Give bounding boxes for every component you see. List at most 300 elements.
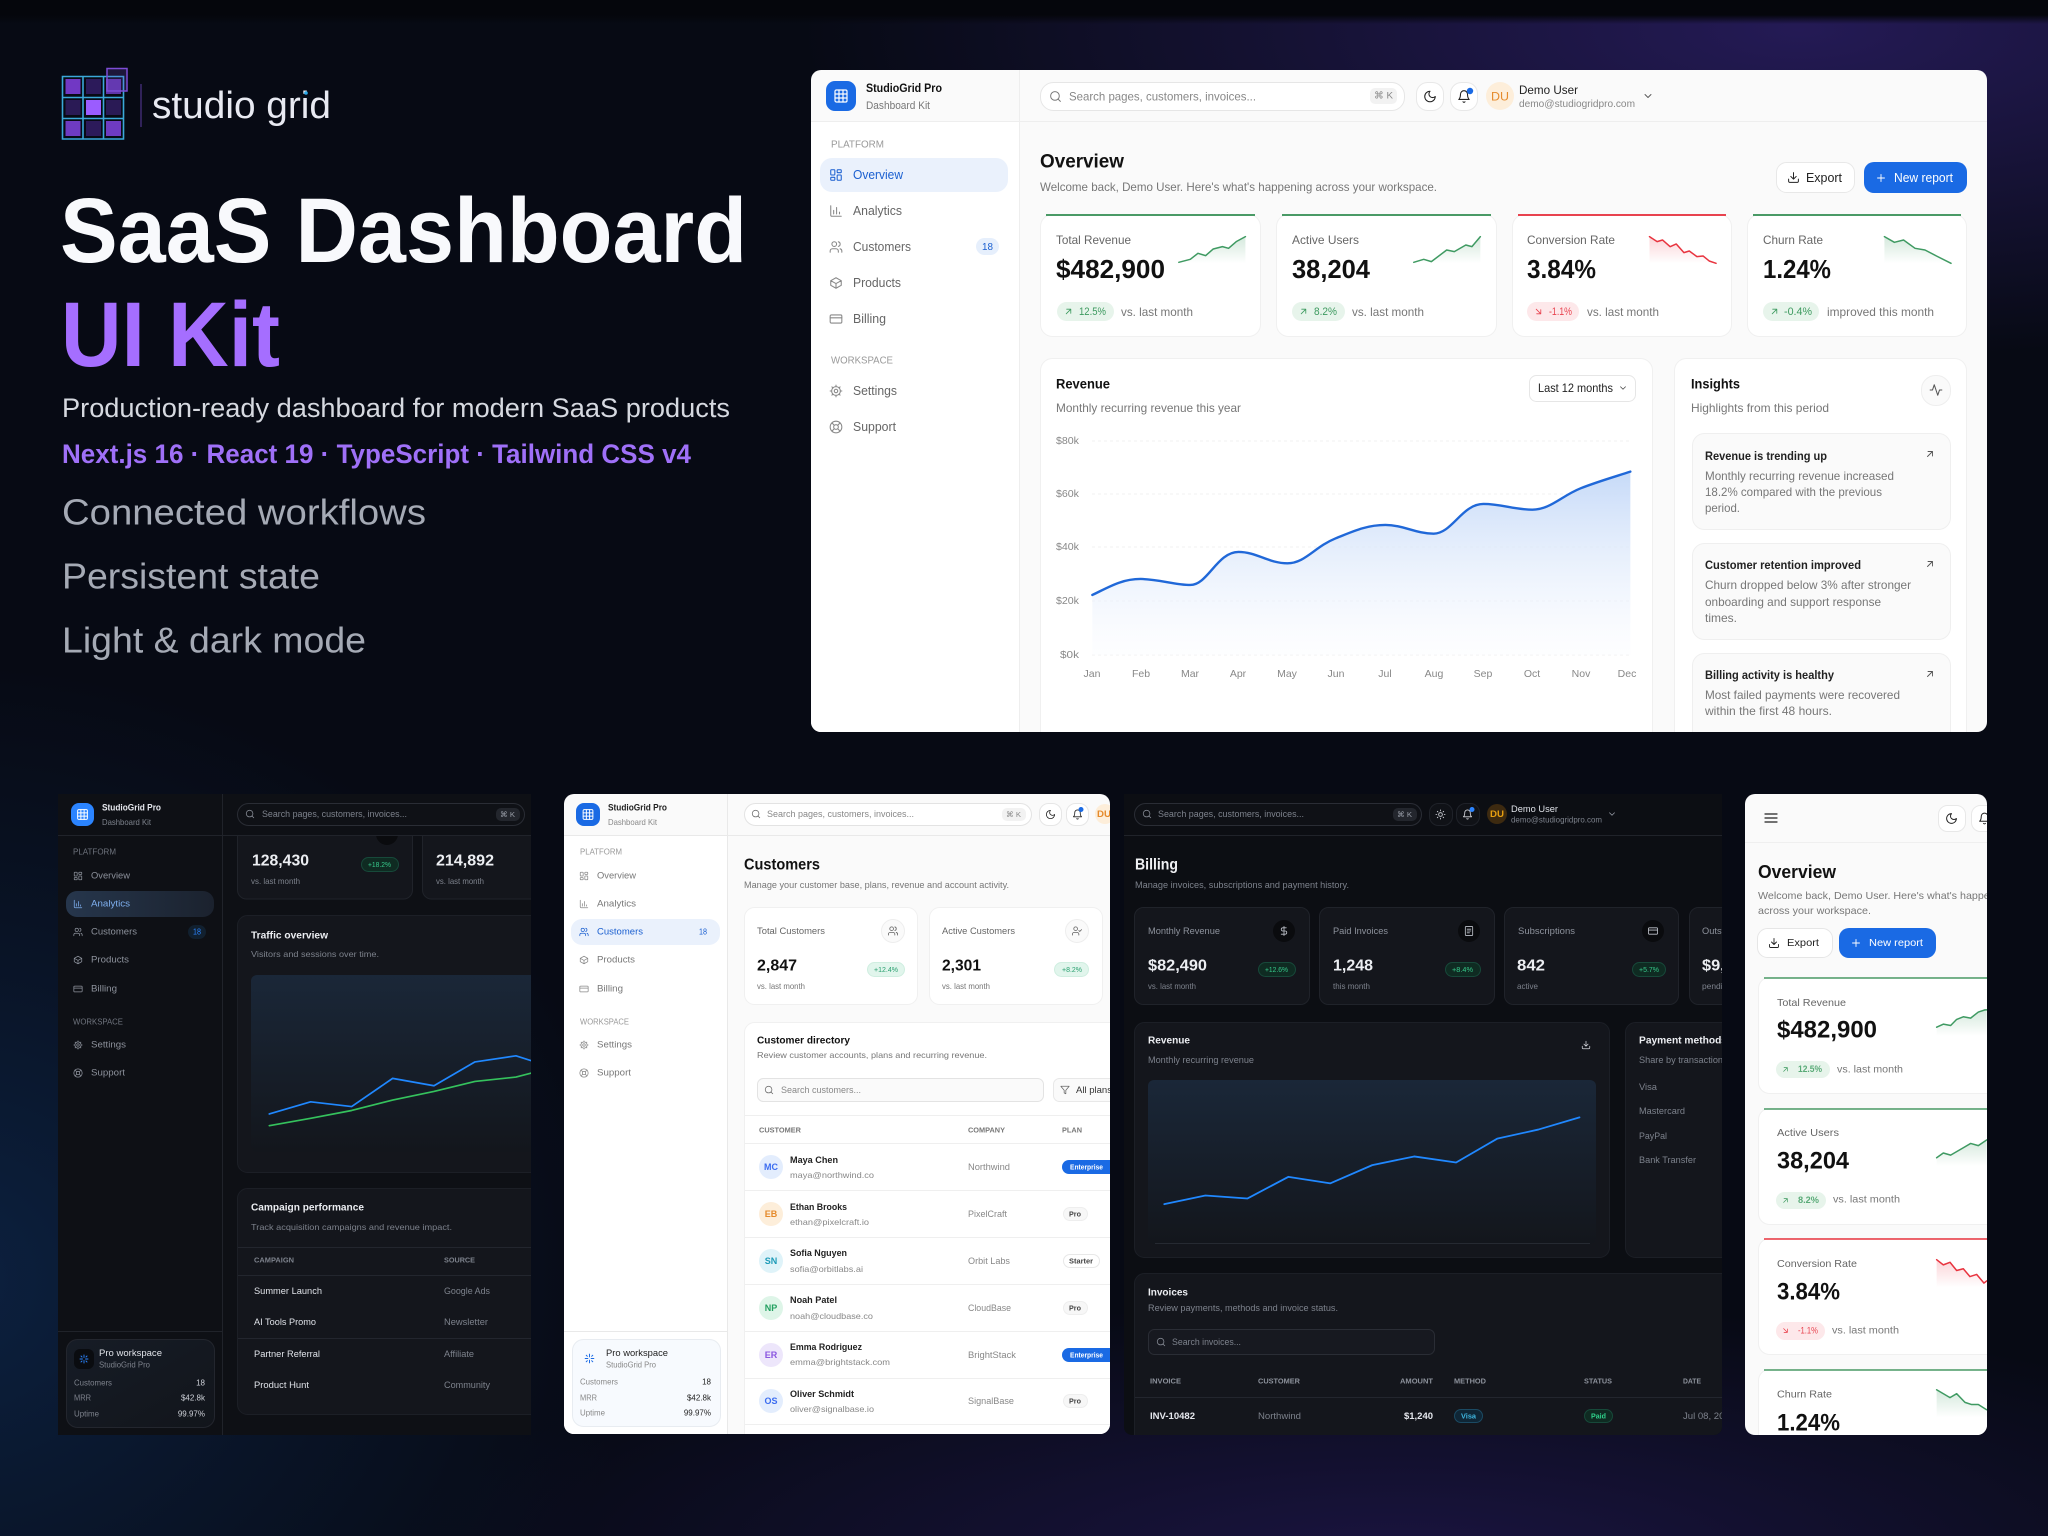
KPI card: Total Customers <box>744 908 918 1004</box>
badge: Visa <box>1454 1410 1482 1422</box>
panel: invoices table: Northwind <box>1258 1411 1301 1421</box>
panel: campaign performance table: Newsletter <box>444 1317 488 1327</box>
KPI card: Total Revenue <box>1040 214 1260 336</box>
panel: traffic overview: Visitors and sessions over time. <box>251 949 379 959</box>
nav: workspace group: Settings <box>853 384 897 398</box>
customer names: Maya Chen <box>790 1155 838 1165</box>
page heading: Overview <box>1758 862 1837 882</box>
user menu: demo@studiogridpro.com <box>1519 98 1635 110</box>
insight: billing: Most failed payments were recovered <box>1705 688 1900 702</box>
KPI card: Active Users: Active Users <box>1292 233 1359 247</box>
KPI card: Paid Invoices: Paid Invoices <box>1333 926 1389 936</box>
panel: insights: Highlights from this period <box>1691 401 1829 415</box>
panel: revenue chart dark: Monthly recurring revenue <box>1148 1055 1254 1065</box>
search customers input <box>758 1078 1044 1102</box>
panel: campaign performance table: Affiliate <box>444 1349 474 1359</box>
plan badges: Pro <box>1069 1304 1081 1312</box>
button: new report: New report <box>1869 937 1923 949</box>
KPI card: Churn Rate: 1.24% <box>1763 254 1831 284</box>
pro workspace card: MRR <box>74 1394 91 1402</box>
nav items: 18 <box>193 928 201 936</box>
area line chart: Jan <box>1084 668 1101 680</box>
button: export <box>1758 928 1832 958</box>
avatars: EB <box>765 1209 778 1219</box>
KPI card: Subscriptions <box>1504 908 1678 1004</box>
KPI card: sessions: 214,892 <box>436 852 494 870</box>
insight: retention: onboarding and support response <box>1705 595 1881 609</box>
nav items: WORKSPACE <box>73 1018 123 1026</box>
top bar: demo@studiogridpro.com <box>1511 816 1602 824</box>
customer emails: emma@brightstack.com <box>790 1357 890 1367</box>
pro workspace card: Pro workspace <box>99 1348 162 1358</box>
KPI card: sessions: vs. last month <box>436 876 484 886</box>
nav items <box>571 848 720 1078</box>
area line chart: $60k <box>1056 488 1080 500</box>
dropdown: period <box>1530 376 1636 402</box>
insight: retention: times. <box>1705 611 1737 625</box>
nav items: Customers <box>91 926 137 938</box>
nav: platform group <box>820 140 1008 326</box>
pro workspace card: Uptime <box>74 1410 100 1418</box>
nav: platform group: Billing <box>853 312 886 326</box>
user menu <box>1486 82 1651 110</box>
plan badges: Enterprise <box>1070 1350 1103 1360</box>
KPI card: Total Customers: +12.4% <box>874 965 898 974</box>
panel: campaign performance table: CAMPAIGN <box>254 1256 294 1264</box>
KPI card: Active Users: Active Users <box>1777 1127 1839 1139</box>
plan badges <box>1062 1160 1118 1408</box>
avatars: MC <box>764 1162 778 1172</box>
KPI card: visitors <box>238 790 412 899</box>
insight: revenue trending <box>1692 434 1950 530</box>
page heading: Manage your customer base, plans, revenue and account activity. <box>744 880 1009 890</box>
KPI card: Paid Invoices: this month <box>1333 981 1370 991</box>
KPI card: Total Revenue <box>1758 978 2048 1094</box>
search bar: ⌘ K <box>500 810 515 819</box>
feature list: Light & dark mode <box>62 620 366 660</box>
KPI card: Total Revenue: 12.5% <box>1798 1064 1822 1075</box>
filter: all plans <box>1054 1078 1154 1102</box>
search bar <box>238 804 524 826</box>
customer emails: sofia@orbitlabs.ai <box>790 1264 863 1274</box>
tech stack line: Next.js 16 · React 19 · TypeScript · Tailwind CSS v4 <box>62 439 691 469</box>
panel: campaign performance table: Track acquisition campaigns and revenue impact. <box>251 1222 452 1232</box>
panel: traffic overview: Traffic overview <box>251 930 328 942</box>
panel: invoices table: DATE <box>1683 1376 1701 1386</box>
logo mark: studio grid <box>62 68 127 139</box>
KPI card: visitors: +18.2% <box>368 860 391 869</box>
insight: retention: Customer retention improved <box>1705 558 1861 572</box>
nav items <box>66 848 214 1078</box>
area line chart: $0k <box>1060 649 1080 661</box>
KPI card: Conversion Rate: 3.84% <box>1527 254 1596 284</box>
KPI card: Active Customers: Active Customers <box>942 926 1016 936</box>
KPI card: Active Users <box>1758 1108 2048 1224</box>
KPI card: Active Users: 38,204 <box>1777 1148 1850 1174</box>
nav: platform group: 18 <box>982 241 993 253</box>
KPI card: Total Customers: vs. last month <box>757 981 805 991</box>
brand block <box>826 81 942 112</box>
KPI card: Total Revenue: Total Revenue <box>1056 233 1131 247</box>
top bar: ⌘ K <box>1006 810 1021 819</box>
panel: customer directory table: COMPANY <box>968 1126 1005 1134</box>
insight: billing <box>1692 654 1950 750</box>
plan badges: Enterprise <box>1070 1162 1103 1172</box>
dropdown: period: Last 12 months <box>1538 381 1613 395</box>
customer names: Sofia Nguyen <box>790 1248 847 1258</box>
nav items: Customers <box>597 926 643 938</box>
nav: workspace group: Support <box>853 420 897 434</box>
subtitle: Production-ready dashboard for modern SaaS products <box>62 393 730 423</box>
panel: customer directory table: Review customer accounts, plans and recurring revenue. <box>757 1050 987 1060</box>
pro workspace card <box>66 1340 214 1428</box>
avatars: NP <box>765 1303 777 1313</box>
button: new report: New report <box>1894 171 1954 185</box>
sidebar <box>564 794 1110 1434</box>
panel: left branding column <box>60 68 747 660</box>
customer emails: maya@northwind.co <box>790 1170 874 1180</box>
panel: payment methods: Bank Transfer <box>1639 1155 1696 1165</box>
KPI card: Monthly Revenue <box>1134 908 1310 1004</box>
panel: invoices table: STATUS <box>1584 1376 1612 1386</box>
area line chart: $20k <box>1056 595 1080 607</box>
nav: platform group: Customers <box>853 240 911 254</box>
top bar: Demo User <box>1511 804 1558 814</box>
feature list: Persistent state <box>62 556 320 596</box>
KPI card: Conversion Rate: vs. last month <box>1587 305 1659 319</box>
insight: retention <box>1692 544 1950 640</box>
feature list: Connected workflows <box>62 492 426 532</box>
page heading <box>1040 152 1437 194</box>
pro workspace card: StudioGrid Pro <box>99 1360 151 1370</box>
KPI card: Active Users: vs. last month <box>1833 1194 1900 1206</box>
nav items: Products <box>597 954 635 966</box>
top bar <box>1745 806 1998 842</box>
page heading: Manage invoices, subscriptions and payment history. <box>1135 880 1349 890</box>
badge: Paid: Paid <box>1591 1412 1606 1420</box>
title: SaaS Dashboard UI Kit: UI Kit <box>61 284 280 386</box>
nav items: 18 <box>699 928 707 936</box>
button: export <box>1776 162 1854 192</box>
pro workspace card: 18 <box>196 1378 206 1388</box>
KPI card: Total Customers: Total Customers <box>757 926 826 936</box>
area line chart: Sep <box>1474 668 1492 680</box>
nav items: Support <box>597 1068 631 1078</box>
panel: campaign performance table: Campaign performance <box>251 1202 364 1214</box>
pro workspace card: Uptime <box>580 1408 606 1418</box>
search bar <box>1040 82 1404 110</box>
nav items: Overview <box>597 870 636 882</box>
nav items: PLATFORM <box>580 848 622 856</box>
insight: retention: Churn dropped below 3% after stronger <box>1705 578 1911 592</box>
area line chart: Jun <box>1328 668 1345 680</box>
panel: campaign performance table: Product Hunt <box>254 1380 310 1390</box>
KPI card: Conversion Rate <box>1758 1238 2048 1354</box>
panel: campaign performance table: Partner Referral <box>254 1349 320 1359</box>
customer names: Emma Rodriguez <box>790 1342 862 1352</box>
panel: payment methods: Mastercard <box>1639 1106 1685 1116</box>
area line chart: Apr <box>1230 668 1247 680</box>
badge: Paid <box>1584 1410 1612 1422</box>
pro workspace card: Customers <box>580 1378 618 1386</box>
page heading: across your workspace. <box>1758 905 1871 917</box>
sidebar <box>811 70 1987 732</box>
sidebar <box>58 794 531 1435</box>
KPI card: Active Users: 8.2% <box>1798 1195 1820 1206</box>
panel: customer directory table <box>744 1022 1164 1462</box>
brand block <box>576 802 667 827</box>
KPI card: Total Revenue: vs. last month <box>1837 1064 1903 1076</box>
panel: payment methods: Visa <box>1639 1082 1657 1092</box>
panel: customers dashboard (light) <box>564 794 1110 1434</box>
customer names: Noah Patel <box>790 1295 837 1305</box>
icon: activity <box>1922 376 1950 406</box>
filter: all plans: All plans <box>1076 1085 1110 1095</box>
panel: invoices table: INVOICE <box>1150 1376 1181 1386</box>
user menu: DU <box>1491 90 1509 104</box>
nav items: Billing <box>597 984 623 994</box>
KPI card: Active Users: vs. last month <box>1352 305 1424 319</box>
area line chart: Oct <box>1524 668 1540 680</box>
panel: insights <box>1674 358 1966 758</box>
companies: BrightStack <box>968 1350 1017 1360</box>
pro workspace card: $42.8k <box>181 1394 206 1402</box>
line chart: traffic <box>251 975 591 1152</box>
KPI card: Subscriptions: active <box>1517 981 1538 991</box>
top bar: Search pages, customers, invoices... <box>1158 809 1304 819</box>
KPI card: Churn Rate: -0.4% <box>1784 306 1812 318</box>
area line chart: Aug <box>1425 668 1443 680</box>
search invoices input: Search invoices... <box>1172 1337 1241 1347</box>
button: new report <box>1839 928 1936 958</box>
brand block: StudioGrid Pro <box>866 81 942 95</box>
brand block: StudioGrid Pro <box>102 802 161 814</box>
nav items: Analytics <box>91 898 130 910</box>
panel: insights: Insights <box>1691 376 1740 392</box>
panel: invoices table: Review payments, methods and invoice status. <box>1148 1303 1338 1313</box>
KPI card: Churn Rate <box>1748 214 1966 336</box>
pro workspace card: StudioGrid Pro <box>606 1360 657 1370</box>
nav: platform group: Products <box>853 276 901 290</box>
pro workspace card: MRR <box>580 1394 597 1402</box>
customer emails <box>790 1170 890 1414</box>
customer emails: noah@cloudbase.co <box>790 1311 873 1321</box>
KPI card: Paid Invoices <box>1320 908 1494 1004</box>
KPI card: Churn Rate: Churn Rate <box>1777 1388 1832 1400</box>
plan badges: Starter <box>1069 1256 1093 1266</box>
KPI card: Conversion Rate: -1.1% <box>1549 306 1572 318</box>
area line chart: Feb <box>1132 668 1150 680</box>
panel: revenue chart dark: Revenue <box>1148 1036 1190 1046</box>
companies: PixelCraft <box>968 1209 1007 1219</box>
panel: invoices table: CUSTOMER <box>1258 1376 1301 1386</box>
panel: invoices table: AMOUNT <box>1400 1376 1433 1386</box>
nav: workspace group <box>830 356 897 434</box>
panel: payment methods <box>1626 1022 1826 1258</box>
line chart: revenue <box>1148 1080 1596 1244</box>
companies: SignalBase <box>968 1396 1014 1406</box>
KPI card: Active Customers: 2,301 <box>942 958 981 974</box>
panel: invoices table: INV-10482 <box>1150 1411 1195 1421</box>
KPI card: Churn Rate: improved this month <box>1827 305 1934 319</box>
panel: customer directory table: CUSTOMER <box>759 1126 802 1134</box>
search bar: ⌘ K <box>1374 90 1394 102</box>
KPI card: sessions <box>422 790 598 899</box>
KPI card: visitors: 128,430 <box>252 852 309 870</box>
panel: invoices table: METHOD <box>1454 1376 1487 1386</box>
insight: revenue trending: period. <box>1705 501 1740 515</box>
user menu: Demo User <box>1519 83 1578 97</box>
companies: Northwind <box>968 1162 1010 1172</box>
panel: customer directory table: PLAN <box>1062 1126 1082 1134</box>
KPI card: Conversion Rate: Conversion Rate <box>1777 1258 1857 1270</box>
area line chart: Mar <box>1181 668 1200 680</box>
nav items: WORKSPACE <box>580 1018 629 1026</box>
KPI card: Active Customers <box>930 908 1102 1004</box>
KPI card: Monthly Revenue: $82,490 <box>1148 958 1207 974</box>
area line chart: $80k <box>1056 435 1080 447</box>
customer emails: oliver@signalbase.io <box>790 1404 874 1414</box>
insight: billing: within the first 48 hours. <box>1704 704 1832 718</box>
search customers input: Search customers... <box>781 1085 861 1095</box>
logo wordmark: studio grid <box>152 85 331 127</box>
nav items: Analytics <box>597 898 636 910</box>
nav items: Overview <box>91 870 130 882</box>
area line chart: Nov <box>1572 668 1591 680</box>
pro workspace card: $42.8k <box>687 1394 712 1402</box>
KPI card: Active Users: 8.2% <box>1314 306 1337 318</box>
panel: revenue chart: Monthly recurring revenue this year <box>1056 401 1241 415</box>
search invoices input <box>1148 1330 1434 1354</box>
KPI card: Total Revenue: 12.5% <box>1079 306 1106 318</box>
page heading: Customers <box>744 856 820 874</box>
panel: invoices table: Invoices <box>1148 1288 1188 1298</box>
panel: mobile overview (light) <box>1745 794 1987 1435</box>
nav items: Settings <box>597 1040 632 1050</box>
panel: analytics dashboard (dark) <box>58 794 531 1435</box>
KPI card: Subscriptions: 842 <box>1517 958 1545 974</box>
plan badges: Pro <box>1069 1210 1081 1218</box>
panel: revenue chart <box>1040 358 1652 758</box>
KPI card: Churn Rate: Churn Rate <box>1763 233 1823 247</box>
panel: main overview dashboard (light) <box>811 70 1987 732</box>
page heading: Welcome back, Demo User. Here's what's happening across your workspace. <box>1040 180 1437 194</box>
panel: revenue chart dark <box>1134 1022 1610 1258</box>
KPI card: Conversion Rate: Conversion Rate <box>1527 233 1615 247</box>
brand block: Dashboard Kit <box>608 817 658 827</box>
brand block: Dashboard Kit <box>102 817 152 827</box>
panel: campaign performance table: AI Tools Promo <box>254 1317 316 1327</box>
nav: platform group: PLATFORM <box>831 140 884 150</box>
KPI card: Total Revenue: $482,900 <box>1056 254 1165 284</box>
avatars: OS <box>764 1396 778 1406</box>
KPI card: Conversion Rate: 3.84% <box>1777 1278 1840 1306</box>
panel: billing dashboard (dark) <box>1124 794 1722 1435</box>
KPI card: visitors: vs. last month <box>251 876 300 886</box>
panel: payment methods: PayPal <box>1639 1131 1667 1141</box>
panel: campaign performance table: Google Ads <box>444 1286 490 1296</box>
avatars: SN <box>765 1256 777 1266</box>
KPI card: Conversion Rate: -1.1% <box>1798 1326 1818 1336</box>
badge: Visa: Visa <box>1461 1412 1477 1420</box>
companies: CloudBase <box>968 1303 1011 1313</box>
avatars <box>759 1155 783 1413</box>
nav items: Products <box>91 954 129 966</box>
customer names <box>790 1155 862 1399</box>
customer names: Ethan Brooks <box>790 1202 847 1212</box>
panel: customer directory table: Customer directory <box>757 1036 850 1046</box>
KPI card: Active Customers: vs. last month <box>942 981 990 991</box>
top bar: ⌘ K <box>1397 810 1412 819</box>
area line chart: $40k <box>1056 541 1080 553</box>
KPI card: Conversion Rate: vs. last month <box>1832 1326 1899 1336</box>
insight: billing: Billing activity is healthy <box>1705 668 1834 682</box>
nav items: Support <box>91 1068 125 1078</box>
pro workspace card: 99.97% <box>178 1410 205 1418</box>
nav items: Settings <box>91 1040 126 1050</box>
insight: revenue trending: Revenue is trending up <box>1705 449 1827 463</box>
page heading: Overview <box>1040 152 1124 172</box>
KPI card: Paid Invoices: +8.4% <box>1452 965 1473 974</box>
pro workspace card: 99.97% <box>684 1408 711 1418</box>
button: export: Export <box>1787 937 1819 949</box>
top bar <box>1134 804 1614 826</box>
KPI card: Total Revenue: vs. last month <box>1121 305 1193 319</box>
top bar: Search pages, customers, invoices... <box>767 809 914 819</box>
KPI card: Total Revenue: $482,900 <box>1777 1016 1877 1044</box>
insight: revenue trending: 18.2% compared with the previous <box>1705 485 1882 499</box>
button: new report <box>1864 162 1967 193</box>
KPI card: Monthly Revenue: Monthly Revenue <box>1148 926 1220 936</box>
companies <box>968 1162 1017 1406</box>
top bar <box>744 804 1115 826</box>
nav items: PLATFORM <box>73 848 116 856</box>
top bar <box>1040 82 1651 110</box>
pro workspace card: Pro workspace <box>606 1348 668 1358</box>
page heading <box>744 856 1009 890</box>
nav: platform group: Analytics <box>853 204 902 218</box>
KPI card: Subscriptions: Subscriptions <box>1518 926 1576 936</box>
feature list <box>62 492 426 660</box>
panel: campaign performance table: SOURCE <box>444 1256 475 1264</box>
nav: workspace group: WORKSPACE <box>831 356 893 366</box>
area line chart: Dec <box>1618 668 1636 680</box>
search bar: Search pages, customers, invoices... <box>262 809 407 819</box>
page heading <box>1758 862 2010 917</box>
KPI card: Total Customers: 2,847 <box>757 958 797 974</box>
pro workspace card: Customers <box>74 1378 112 1388</box>
nav items: Billing <box>91 984 117 994</box>
panel: revenue chart: Revenue <box>1056 376 1110 392</box>
KPI card: Total Revenue: Total Revenue <box>1777 997 1846 1009</box>
customer names: Oliver Schmidt <box>790 1389 854 1399</box>
area line chart: May <box>1277 668 1298 680</box>
top bar background <box>58 794 531 835</box>
pro workspace card <box>572 1340 720 1426</box>
panel: payment methods: Share by transaction <box>1639 1055 1722 1065</box>
nav: platform group: Overview <box>853 168 904 182</box>
page heading: Billing <box>1135 856 1178 874</box>
KPI card: Active Customers: +8.2% <box>1062 965 1082 974</box>
area line chart: Jul <box>1378 668 1392 680</box>
brand block: StudioGrid Pro <box>608 802 667 814</box>
pro workspace card: 18 <box>702 1378 712 1386</box>
avatars: ER <box>765 1350 778 1360</box>
area line chart <box>1056 435 1636 680</box>
customer emails: ethan@pixelcraft.io <box>790 1217 869 1227</box>
icon: notifications <box>1450 82 1478 110</box>
KPI card: Outstanding <box>1690 908 1864 1004</box>
